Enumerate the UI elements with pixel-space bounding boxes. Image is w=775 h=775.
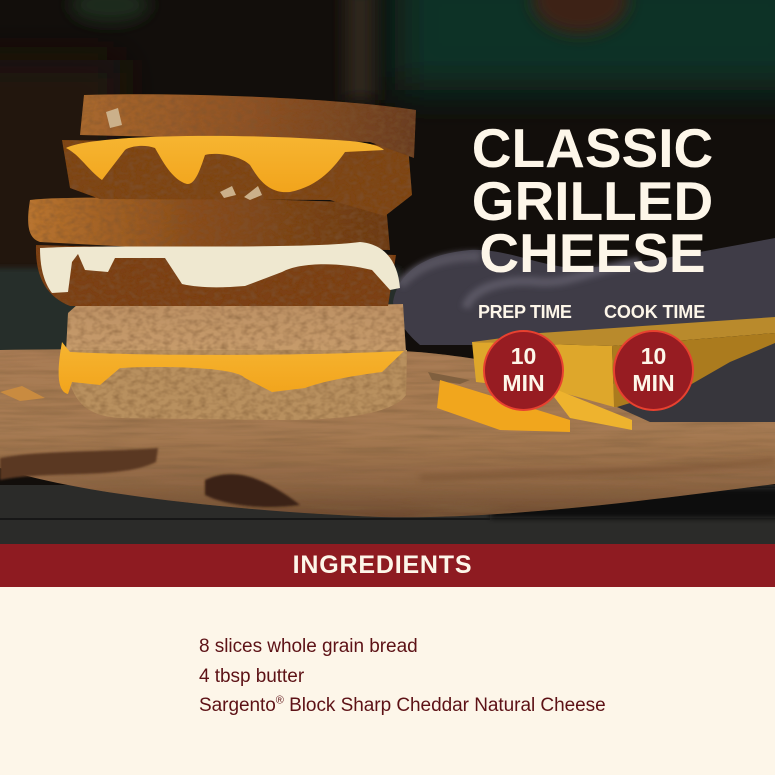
grey cloth <box>393 238 775 345</box>
prep time badge: MIN <box>502 370 545 396</box>
prep time label: PREP TIME <box>478 302 572 322</box>
bottom sandwich lower slice <box>66 350 407 420</box>
title: CHEESE <box>479 222 706 284</box>
cook time badge: 10 <box>641 343 666 369</box>
middle sandwich upper slice <box>28 197 390 250</box>
prep time badge <box>483 330 564 411</box>
title: GRILLED <box>472 170 713 232</box>
bottom cheddar <box>59 342 404 394</box>
cheddar block and slices <box>437 317 775 432</box>
middle sandwich lower slice <box>36 245 396 306</box>
oat flakes <box>106 108 262 200</box>
cook time label: COOK TIME <box>604 302 705 322</box>
ingredients heading: INGREDIENTS <box>293 551 472 579</box>
lower cloth fold <box>617 343 775 422</box>
ingredients list: 8 slices whole grain bread <box>199 636 418 657</box>
top sandwich lower slice <box>62 140 412 216</box>
cook time badge: MIN <box>632 370 675 396</box>
cook time badge <box>613 330 694 411</box>
top cheddar <box>66 136 384 192</box>
prep time badge: 10 <box>511 343 536 369</box>
background <box>0 0 775 544</box>
title <box>472 117 713 284</box>
ingredients heading <box>0 544 775 587</box>
white cheese <box>40 242 400 293</box>
bottom sandwich upper slice <box>66 304 406 352</box>
ingredients list: Sargento® Block Sharp Cheddar Natural Cheese <box>199 695 606 716</box>
cutting board <box>0 349 775 517</box>
photo: grilled cheese stack on wooden board <box>0 0 775 544</box>
ingredients list: 4 tbsp butter <box>199 666 304 686</box>
sandwich stack <box>28 94 416 420</box>
ingredients list <box>199 636 606 716</box>
title: CLASSIC <box>472 117 713 179</box>
top sandwich upper slice <box>80 94 416 158</box>
